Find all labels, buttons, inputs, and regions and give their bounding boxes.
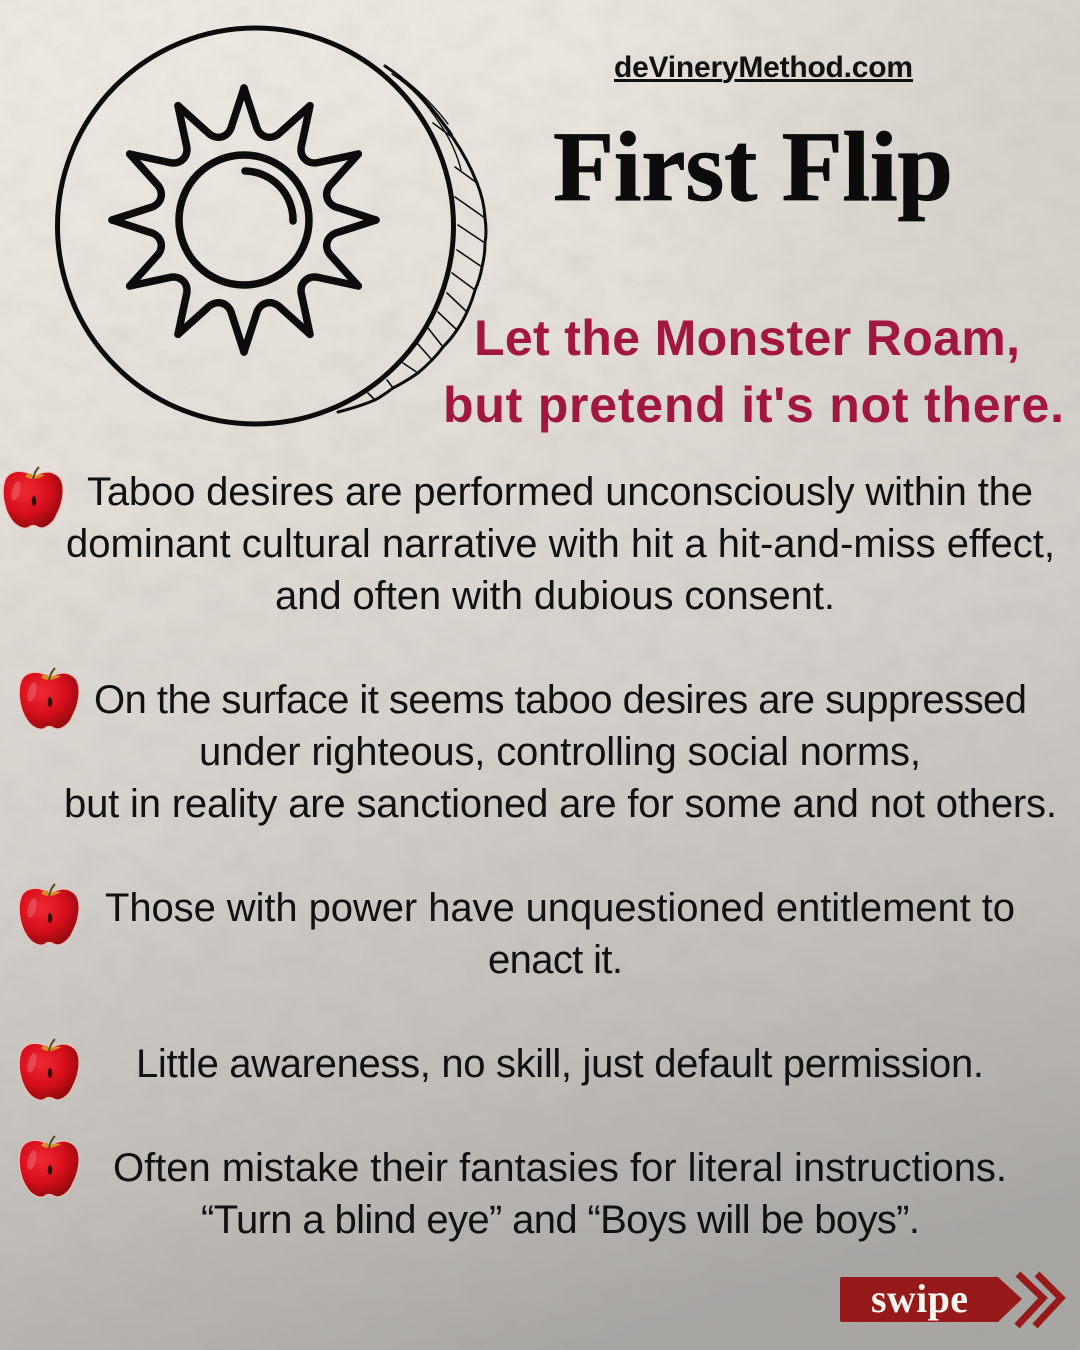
text <box>113 1146 1007 1242</box>
icon: apple <box>19 884 79 945</box>
bullet 5 <box>19 1136 1007 1242</box>
subtitle: Let the Monster Roam, <box>474 310 1020 366</box>
coin face <box>58 28 454 424</box>
text: “Turn a blind eye” and “Boys will be boys”. <box>201 1198 920 1242</box>
sun highlight <box>245 171 293 221</box>
icon: apple <box>19 668 79 729</box>
swipe label: swipe <box>871 1276 968 1321</box>
arrow tag <box>840 1277 1022 1322</box>
text: and often with dubious consent. <box>275 574 835 618</box>
subtitle: but pretend it's not there. <box>443 377 1064 433</box>
subtitle <box>443 310 1064 433</box>
chevrons <box>1017 1274 1061 1326</box>
text: but in reality are sanctioned are for some and not others. <box>64 782 1057 826</box>
sun disc <box>179 155 309 285</box>
text: enact it. <box>488 938 623 982</box>
icon: apple <box>19 1039 79 1100</box>
bullet 2 <box>19 668 1057 826</box>
icon: coin with sun <box>58 28 486 424</box>
text: under righteous, controlling social norms, <box>199 730 921 774</box>
text: Those with power have unquestioned entitlement to <box>105 886 1015 930</box>
icon: apple <box>19 1136 79 1197</box>
website link: deVineryMethod.com <box>614 51 913 84</box>
text <box>66 470 1055 618</box>
coin edge <box>338 66 486 412</box>
text <box>64 678 1057 826</box>
title: First Flip <box>553 111 953 222</box>
text: On the surface it seems taboo desires are suppressed <box>94 678 1027 722</box>
text: dominant cultural narrative with hit a hit-and-miss effect, <box>66 522 1055 566</box>
icon: apple <box>3 467 63 528</box>
swipe arrow <box>840 1274 1061 1326</box>
bullet 4 <box>19 1039 984 1100</box>
bullet 3 <box>19 884 1015 982</box>
text: Little awareness, no skill, just default permission. <box>136 1042 984 1086</box>
bullet 1 <box>3 467 1055 618</box>
text: Often mistake their fantasies for literal instructions. <box>113 1146 1007 1190</box>
text <box>105 886 1015 982</box>
text: Taboo desires are performed unconsciously within the <box>87 470 1033 514</box>
sun rays <box>97 73 391 367</box>
